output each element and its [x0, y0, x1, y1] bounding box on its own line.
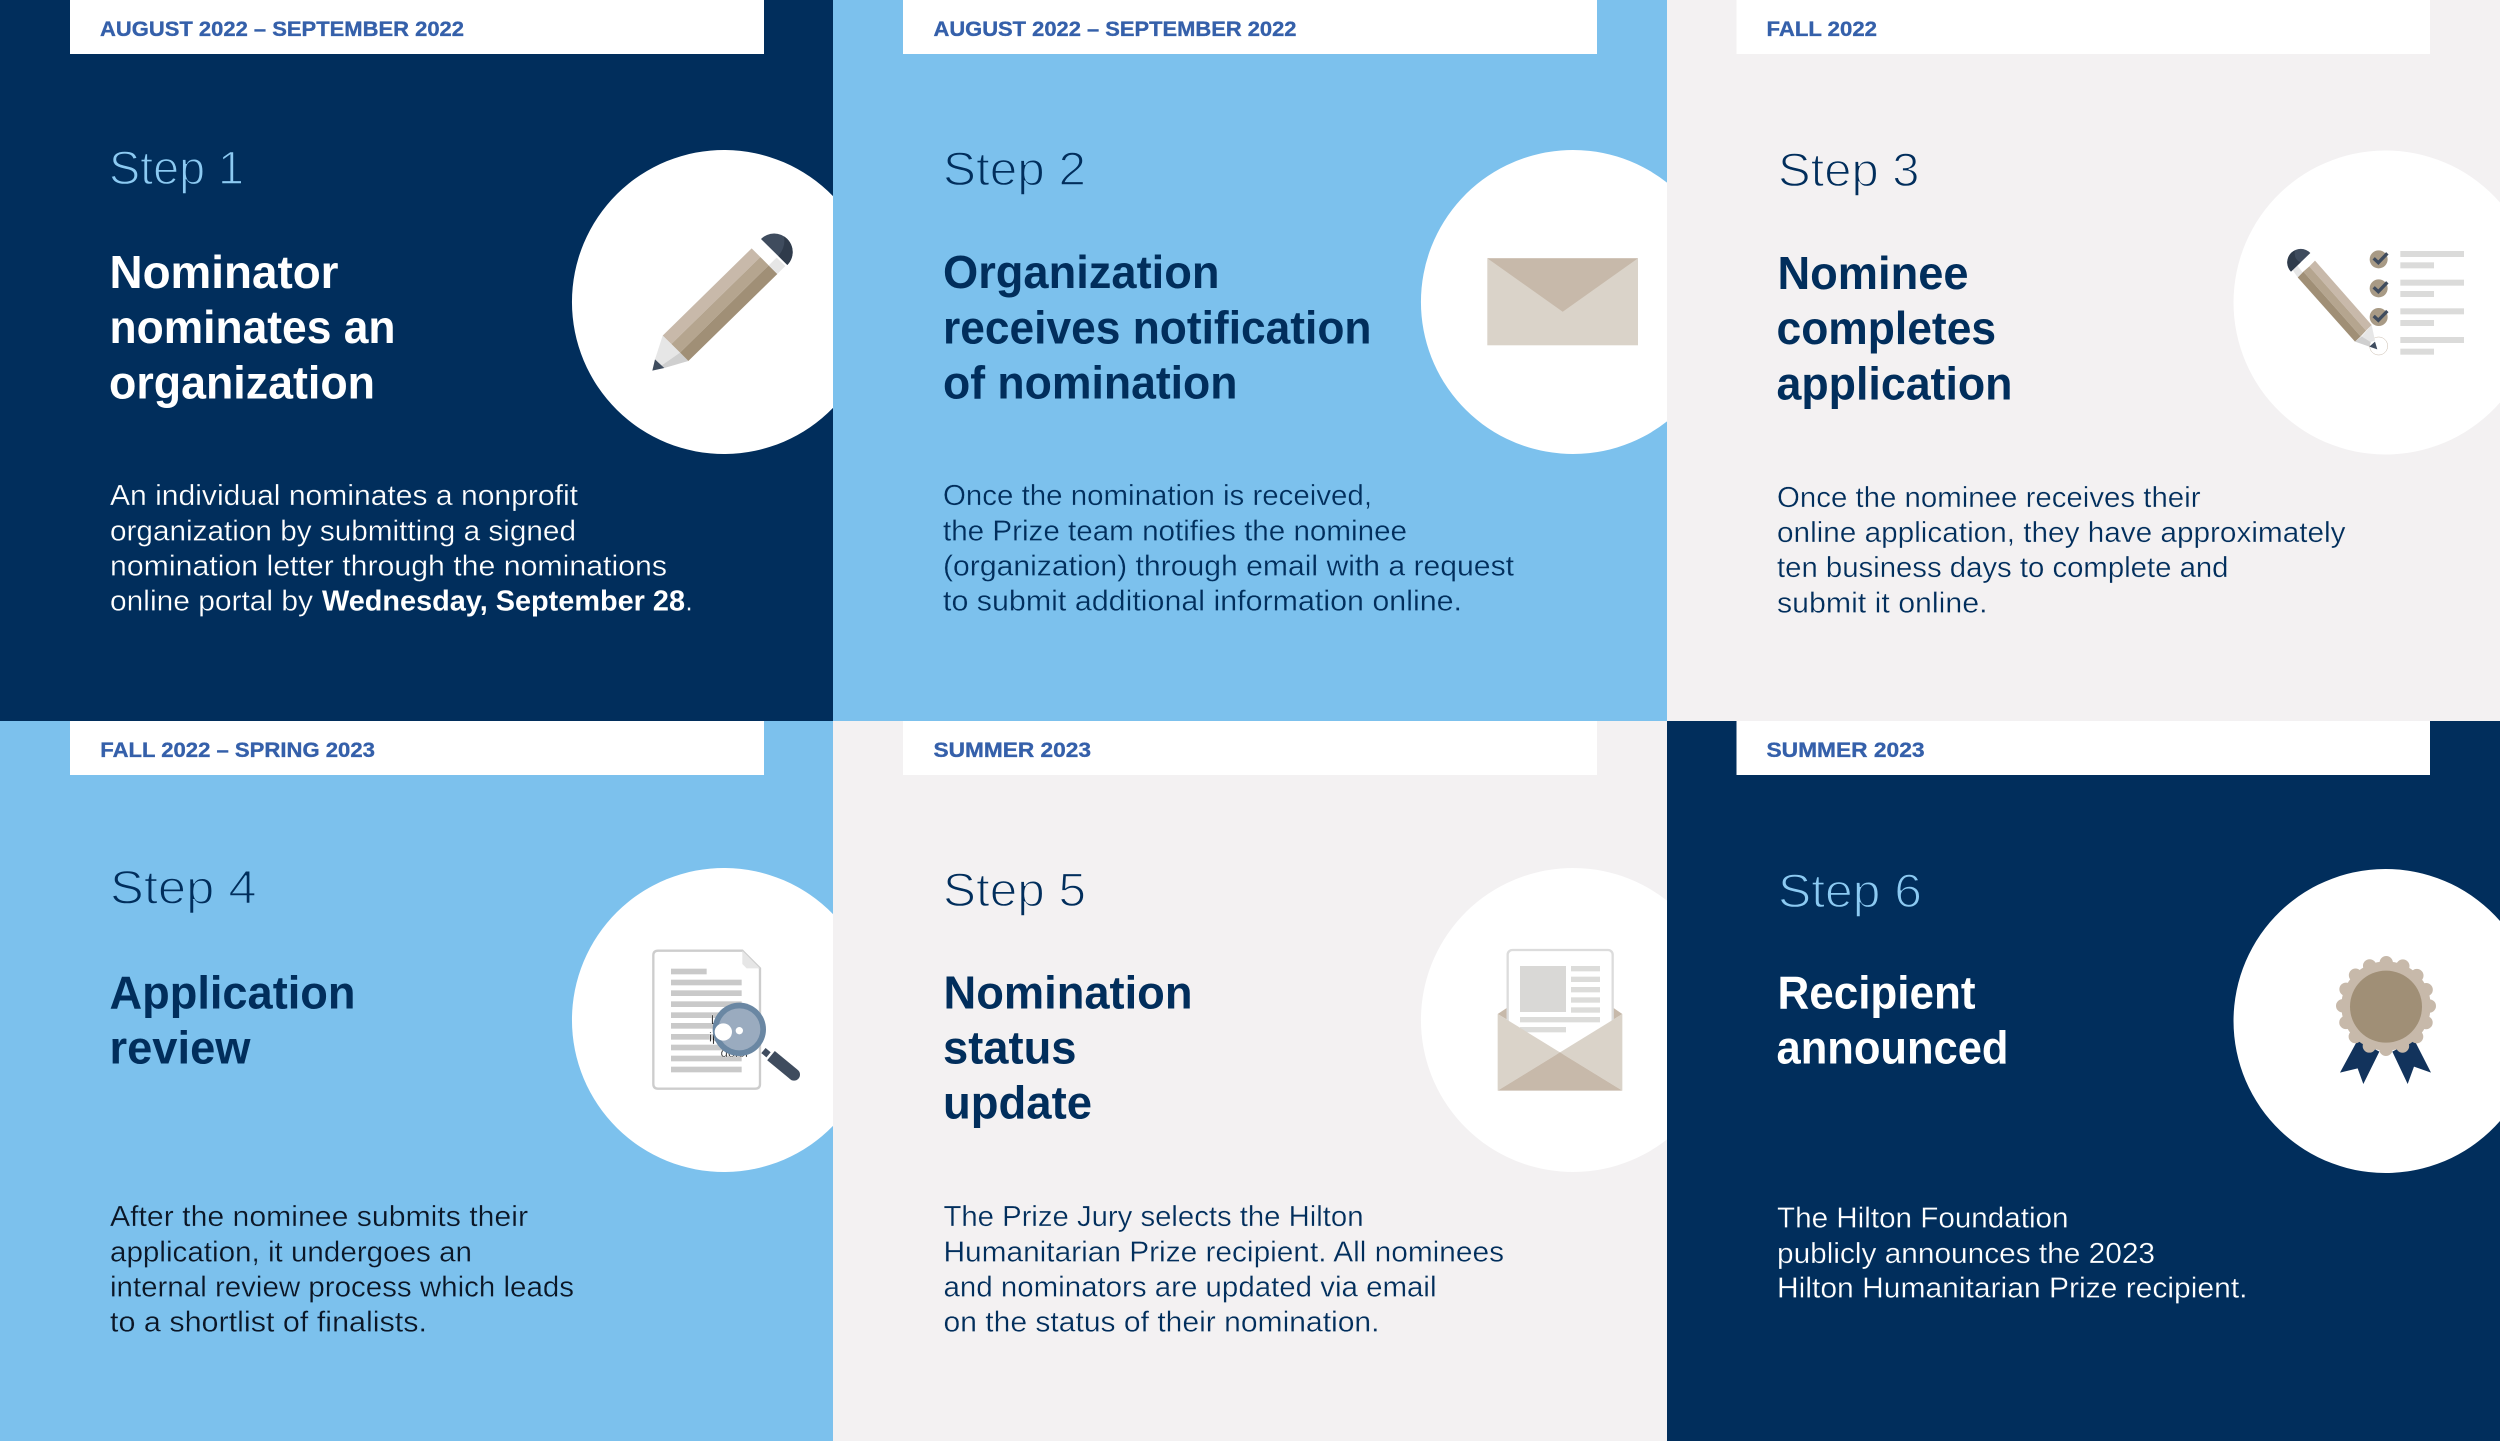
panel: step 6 — [1667, 721, 2500, 1441]
date tag: step 2 — [903, 0, 1597, 54]
date tag: step 1: AUGUST 2022 – SEPTEMBER 2022 — [100, 18, 464, 41]
icon: closed envelope — [1487, 258, 1638, 345]
body text: step 6 — [1777, 1202, 2248, 1305]
panel: step 1 — [0, 0, 833, 721]
body text: step 1 — [110, 480, 693, 618]
body text: step 1: Wednesday, September 28 — [322, 586, 685, 618]
heading: step 3: Nominee — [1778, 247, 1968, 299]
body text: step 2: (organization) through email with a request — [943, 550, 1514, 582]
date tag: step 4 — [70, 721, 764, 775]
heading: step 3 — [1776, 247, 2012, 410]
heading: step 4: review — [110, 1022, 251, 1074]
icon: pencil and checklist — [2287, 249, 2464, 355]
body text: step 3: ten business days to complete and — [1777, 552, 2228, 584]
body text: step 1: . — [685, 586, 693, 618]
body text: step 6: Hilton Humanitarian Prize recipient. — [1777, 1273, 2248, 1305]
heading: step 4: Application — [110, 966, 356, 1018]
body text: step 1: online portal by — [110, 586, 314, 618]
step label 3: Step 3 — [1778, 143, 1920, 196]
icon: document and magnifying glass: ipsum — [709, 1030, 745, 1045]
step label 4: Step 4 — [110, 861, 257, 914]
body text: step 2: to submit additional information online. — [943, 586, 1462, 618]
icon: pencil — [652, 233, 793, 371]
icon circle: step 4 — [572, 868, 833, 1172]
body text: step 6: publicly announces the 2023 — [1777, 1238, 2155, 1270]
date tag: step 1 — [70, 0, 764, 54]
icon: document and magnifying glass: dolor — [721, 1045, 750, 1060]
heading: step 5: status — [943, 1022, 1076, 1074]
heading: step 5: Nomination — [944, 966, 1192, 1018]
body text: step 3: Once the nominee receives their — [1777, 482, 2201, 514]
body text: step 5: Humanitarian Prize recipient. All nominees — [944, 1236, 1504, 1268]
body text: step 2: Once the nomination is received, — [943, 480, 1372, 512]
panel: step 3 — [1667, 0, 2500, 721]
panel: step 2 — [833, 0, 1667, 721]
body text: step 6: The Hilton Foundation — [1777, 1202, 2068, 1234]
body text: step 4: After the nominee submits their — [110, 1201, 528, 1233]
heading: step 1 — [109, 246, 396, 408]
icon circle: step 3 — [2234, 151, 2500, 455]
icon circle: step 6 — [2234, 869, 2500, 1173]
body text: step 3: submit it online. — [1777, 588, 1988, 620]
panel: step 4 — [0, 721, 833, 1441]
body text: step 2 — [943, 480, 1514, 618]
icon: document and magnifying glass — [653, 951, 800, 1089]
heading: step 4 — [110, 966, 356, 1074]
body text: step 3 — [1777, 482, 2346, 620]
heading: step 5 — [943, 966, 1192, 1129]
panel: step 5 — [833, 721, 1667, 1441]
body text: step 5 — [944, 1201, 1504, 1339]
body text: step 5: The Prize Jury selects the Hilton — [944, 1201, 1364, 1233]
step label 6: Step 6 — [1778, 864, 1922, 917]
step label 5: Step 5 — [943, 863, 1086, 916]
step label 1: Step 1 — [109, 141, 244, 194]
date tag: step 4: FALL 2022 – SPRING 2023 — [100, 739, 375, 762]
date tag: step 3 — [1736, 0, 2430, 54]
heading: step 6: Recipient — [1778, 966, 1976, 1018]
heading: step 3: completes — [1776, 302, 1996, 354]
icon circle: step 5 — [1421, 868, 1667, 1172]
body text: step 1: nomination letter through the nominations — [110, 550, 667, 582]
body text: step 1: An individual nominates a nonprofit — [110, 480, 578, 512]
step label 2: Step 2 — [943, 142, 1086, 195]
heading: step 5: update — [943, 1077, 1092, 1129]
heading: step 6: announced — [1776, 1022, 2008, 1074]
heading: step 2: of nomination — [943, 356, 1238, 408]
date tag: step 5 — [903, 721, 1597, 775]
heading: step 2: Organization — [943, 246, 1220, 298]
heading: step 1: organization — [109, 356, 375, 408]
body text: step 4: internal review process which leads — [110, 1271, 574, 1303]
heading: step 3: application — [1776, 358, 2012, 410]
body text: step 3: online application, they have approximately — [1777, 517, 2346, 549]
body text: step 4 — [110, 1201, 574, 1339]
body text: step 5: on the status of their nomination. — [944, 1307, 1380, 1339]
icon circle: step 1 — [572, 150, 833, 454]
body text: step 5: and nominators are updated via email — [944, 1271, 1436, 1303]
date tag: step 6 — [1736, 721, 2430, 775]
icon: open envelope with letter — [1498, 950, 1622, 1091]
heading: step 1: nominates an — [110, 301, 396, 353]
body text: step 1: organization by submitting a signed — [110, 515, 576, 547]
date tag: step 3: FALL 2022 — [1766, 18, 1877, 41]
icon: document and magnifying glass: Lorem — [711, 1012, 748, 1027]
date tag: step 6: SUMMER 2023 — [1766, 739, 1924, 762]
icon: award rosette — [2340, 961, 2431, 1084]
body text: step 4: to a shortlist of finalists. — [110, 1307, 427, 1339]
body text: step 2: the Prize team notifies the nominee — [943, 515, 1407, 547]
heading: step 1: Nominator — [110, 246, 339, 298]
heading: step 6 — [1776, 966, 2008, 1074]
heading: step 2 — [943, 246, 1372, 408]
date tag: step 2: AUGUST 2022 – SEPTEMBER 2022 — [934, 18, 1296, 41]
body text: step 4: application, it undergoes an — [110, 1236, 472, 1268]
icon circle: step 2 — [1421, 150, 1667, 454]
date tag: step 5: SUMMER 2023 — [934, 739, 1091, 762]
heading: step 2: receives notification — [943, 302, 1372, 354]
